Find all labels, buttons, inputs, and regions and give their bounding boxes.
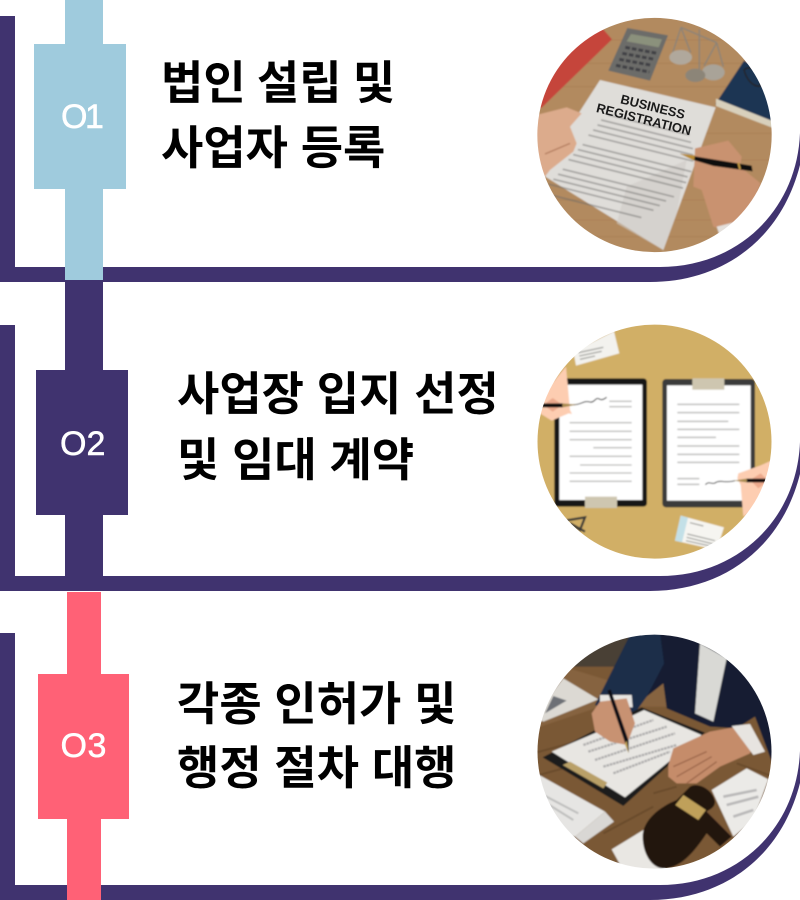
gavel — [643, 785, 732, 868]
photo: lawyer signing with gavel — [538, 634, 772, 868]
calculator — [608, 28, 668, 81]
pen — [680, 154, 753, 171]
pillar: step 1 — [34, 0, 126, 280]
right hand with pen — [736, 460, 770, 517]
frame: step 1 curved bracket — [0, 16, 800, 282]
clip — [563, 762, 607, 788]
papers — [533, 772, 605, 837]
number 02: O — [60, 425, 86, 463]
number 01: 1 — [85, 98, 104, 136]
pillar: step 2 — [36, 280, 128, 591]
clipboard — [543, 707, 705, 806]
resting hand — [668, 727, 754, 783]
paper heading: BUSINESS — [619, 91, 687, 122]
frame: step 3 curved bracket — [0, 633, 800, 900]
pillar: step 3 — [38, 592, 129, 900]
glasses — [565, 517, 585, 532]
heading: step 1: 사업자 등록 — [161, 122, 385, 174]
heading: step 3: 각종 인허가 및 — [177, 678, 456, 730]
right clipboard — [662, 379, 755, 507]
panel: step 2 — [0, 280, 800, 591]
number 02: 2 — [86, 425, 105, 463]
writing hand — [600, 695, 633, 707]
panel: step 3 — [0, 592, 800, 900]
frame: step 2 curved bracket — [0, 325, 800, 591]
paper text lines — [548, 114, 694, 219]
number 03: O — [60, 727, 87, 765]
left hand — [537, 107, 582, 177]
right hand — [693, 141, 761, 230]
heading: step 3: 행정 절차 대행 — [177, 742, 456, 794]
paper — [540, 80, 716, 250]
photo: business registration signing — [537, 18, 772, 252]
left clipboard — [554, 378, 647, 507]
red folder — [540, 30, 612, 109]
laptop — [533, 678, 598, 722]
left hand with pen — [540, 366, 572, 422]
heading: step 2: 사업장 입지 선정 — [177, 368, 499, 420]
photo: contract signing illustration — [538, 324, 772, 559]
suit — [646, 634, 772, 762]
panel: step 1 — [0, 0, 800, 282]
note top left — [573, 331, 619, 366]
scales — [673, 27, 723, 72]
number 03: 3 — [88, 727, 106, 765]
heading: step 2: 및 임대 계약 — [177, 434, 414, 486]
heading: step 1: 법인 설립 및 — [161, 57, 395, 109]
notebook — [715, 60, 771, 121]
note bottom right — [675, 516, 724, 550]
number 01: O — [61, 98, 87, 136]
paper heading: REGISTRATION — [595, 100, 693, 138]
